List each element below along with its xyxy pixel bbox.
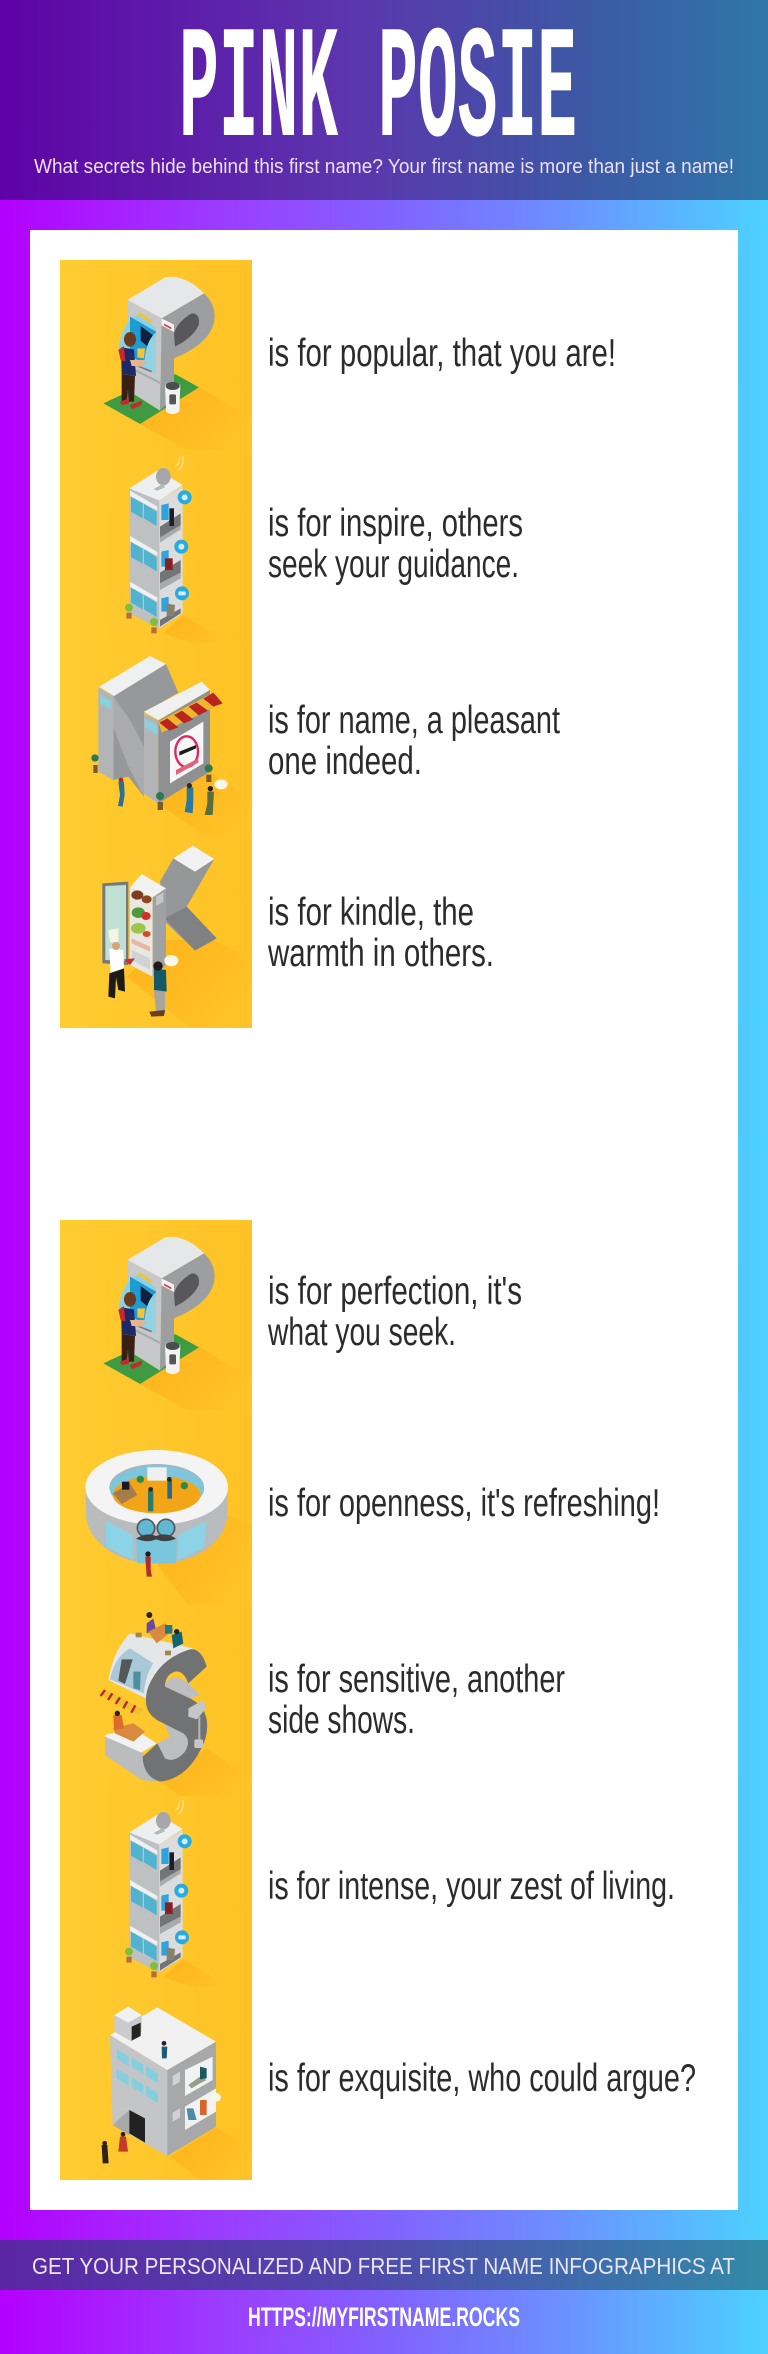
panel: yellow illustration column, second word [60, 1220, 252, 2180]
text block: K kindle [267, 891, 494, 975]
text block: P popular: is for popular, that you are! [268, 332, 616, 375]
icon: letter N shop building [91, 656, 252, 837]
text block: P perfection [267, 1270, 522, 1354]
icon: letter I office tower (repeat) [125, 1800, 227, 1988]
icon: letter S building [100, 1612, 252, 1796]
icon: letter I office tower [125, 456, 227, 644]
icon: letter P ATM building [103, 277, 252, 450]
icon: letter P ATM building (repeat) [103, 1237, 252, 1410]
text block: K kindle: warmth in others. [267, 932, 494, 975]
subtitle: What secrets hide behind this first name? Your first name is more than just a name! [34, 156, 734, 178]
text block: P perfection: is for perfection, it's [268, 1270, 522, 1313]
text block: I inspire: is for inspire, others [268, 502, 523, 545]
text block: S sensitive: side shows. [268, 1699, 415, 1742]
text block: S sensitive: is for sensitive, another [268, 1658, 565, 1701]
icon: letter O optician building [85, 1450, 252, 1604]
text block: N name [268, 699, 560, 783]
icon: letter K refrigerator building [102, 846, 252, 1028]
panel: yellow illustration column, first word [60, 260, 252, 1028]
text block: I inspire: seek your guidance. [268, 543, 519, 586]
text block: I inspire [268, 502, 523, 586]
text block: K kindle: is for kindle, the [268, 891, 474, 934]
text block: S sensitive [268, 1658, 565, 1742]
text block: P perfection: what you seek. [267, 1311, 456, 1354]
text block: N name: is for name, a pleasant [268, 699, 560, 742]
header band [0, 0, 768, 200]
panel: white content card [30, 230, 738, 2210]
footer band [0, 2240, 768, 2290]
text block: N name: one indeed. [268, 740, 422, 783]
icon: letter X apartment building [102, 2007, 252, 2180]
title: PINK POSIE [179, 2, 577, 184]
footer URL: HTTPS://MYFIRSTNAME.ROCKS [248, 2302, 520, 2332]
